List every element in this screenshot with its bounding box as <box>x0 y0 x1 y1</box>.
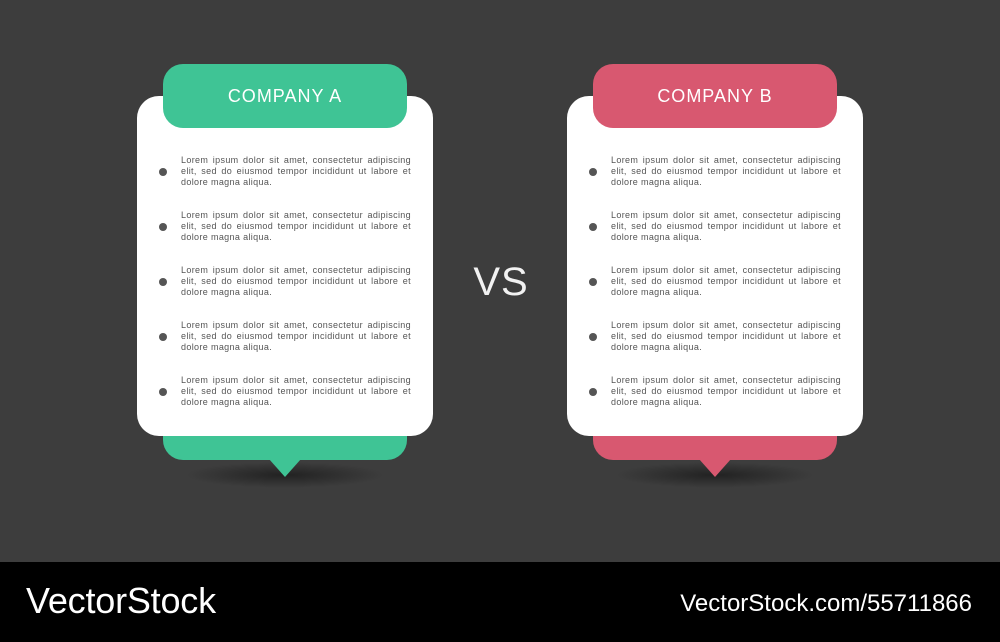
heading: company B <box>593 64 837 128</box>
item A2: elit, sed do eiusmod tempor incididunt ut labore et <box>181 221 411 231</box>
item A1: dolore magna aliqua. <box>181 177 272 187</box>
item B3: Lorem ipsum dolor sit amet, consectetur adipiscing <box>611 265 841 275</box>
panel: company B <box>567 64 863 477</box>
pointer A <box>269 459 301 477</box>
item B2: elit, sed do eiusmod tempor incididunt ut labore et <box>611 221 841 231</box>
item A2: dolore magna aliqua. <box>181 232 272 242</box>
item A5 <box>159 375 411 407</box>
item A4 <box>159 320 411 352</box>
item B3: dolore magna aliqua. <box>611 287 702 297</box>
item A3: elit, sed do eiusmod tempor incididunt ut labore et <box>181 276 411 286</box>
panel: company A <box>137 64 433 477</box>
item B1: elit, sed do eiusmod tempor incididunt ut labore et <box>611 166 841 176</box>
item B1 <box>589 155 841 187</box>
item A1: elit, sed do eiusmod tempor incididunt ut labore et <box>181 166 411 176</box>
item B5: Lorem ipsum dolor sit amet, consectetur adipiscing <box>611 375 841 385</box>
item B5: dolore magna aliqua. <box>611 397 702 407</box>
item A5: dolore magna aliqua. <box>181 397 272 407</box>
item A5: Lorem ipsum dolor sit amet, consectetur adipiscing <box>181 375 411 385</box>
heading: company A: COMPANY A <box>228 86 342 106</box>
shadow B <box>615 462 815 488</box>
item A4: Lorem ipsum dolor sit amet, consectetur adipiscing <box>181 320 411 330</box>
item A4: dolore magna aliqua. <box>181 342 272 352</box>
item A4: elit, sed do eiusmod tempor incididunt ut labore et <box>181 331 411 341</box>
item A1: Lorem ipsum dolor sit amet, consectetur adipiscing <box>181 155 411 165</box>
item B1: Lorem ipsum dolor sit amet, consectetur adipiscing <box>611 155 841 165</box>
card A <box>137 96 433 436</box>
item B4: Lorem ipsum dolor sit amet, consectetur adipiscing <box>611 320 841 330</box>
heading: company B: COMPANY B <box>657 86 773 106</box>
item A2: Lorem ipsum dolor sit amet, consectetur adipiscing <box>181 210 411 220</box>
item B4 <box>589 320 841 352</box>
item B3: elit, sed do eiusmod tempor incididunt ut labore et <box>611 276 841 286</box>
footer bar <box>0 562 1000 642</box>
item B4: elit, sed do eiusmod tempor incididunt ut labore et <box>611 331 841 341</box>
pointer B <box>699 459 731 477</box>
item B4: dolore magna aliqua. <box>611 342 702 352</box>
item B5 <box>589 375 841 407</box>
footer logo: VectorStock <box>26 580 216 621</box>
item A2 <box>159 210 411 242</box>
item A3: dolore magna aliqua. <box>181 287 272 297</box>
item B3 <box>589 265 841 297</box>
item B2: dolore magna aliqua. <box>611 232 702 242</box>
shadow A <box>185 462 385 488</box>
item B2: Lorem ipsum dolor sit amet, consectetur adipiscing <box>611 210 841 220</box>
item A5: elit, sed do eiusmod tempor incididunt ut labore et <box>181 386 411 396</box>
item B5: elit, sed do eiusmod tempor incididunt ut labore et <box>611 386 841 396</box>
item A3 <box>159 265 411 297</box>
card B <box>567 96 863 436</box>
bottom tab B <box>593 400 837 460</box>
heading: company A <box>163 64 407 128</box>
footer url: VectorStock.com/55711866 <box>680 590 972 617</box>
item A1 <box>159 155 411 187</box>
bottom tab A <box>163 400 407 460</box>
item A3: Lorem ipsum dolor sit amet, consectetur adipiscing <box>181 265 411 275</box>
item B1: dolore magna aliqua. <box>611 177 702 187</box>
VS label: VS <box>473 260 529 304</box>
item B2 <box>589 210 841 242</box>
